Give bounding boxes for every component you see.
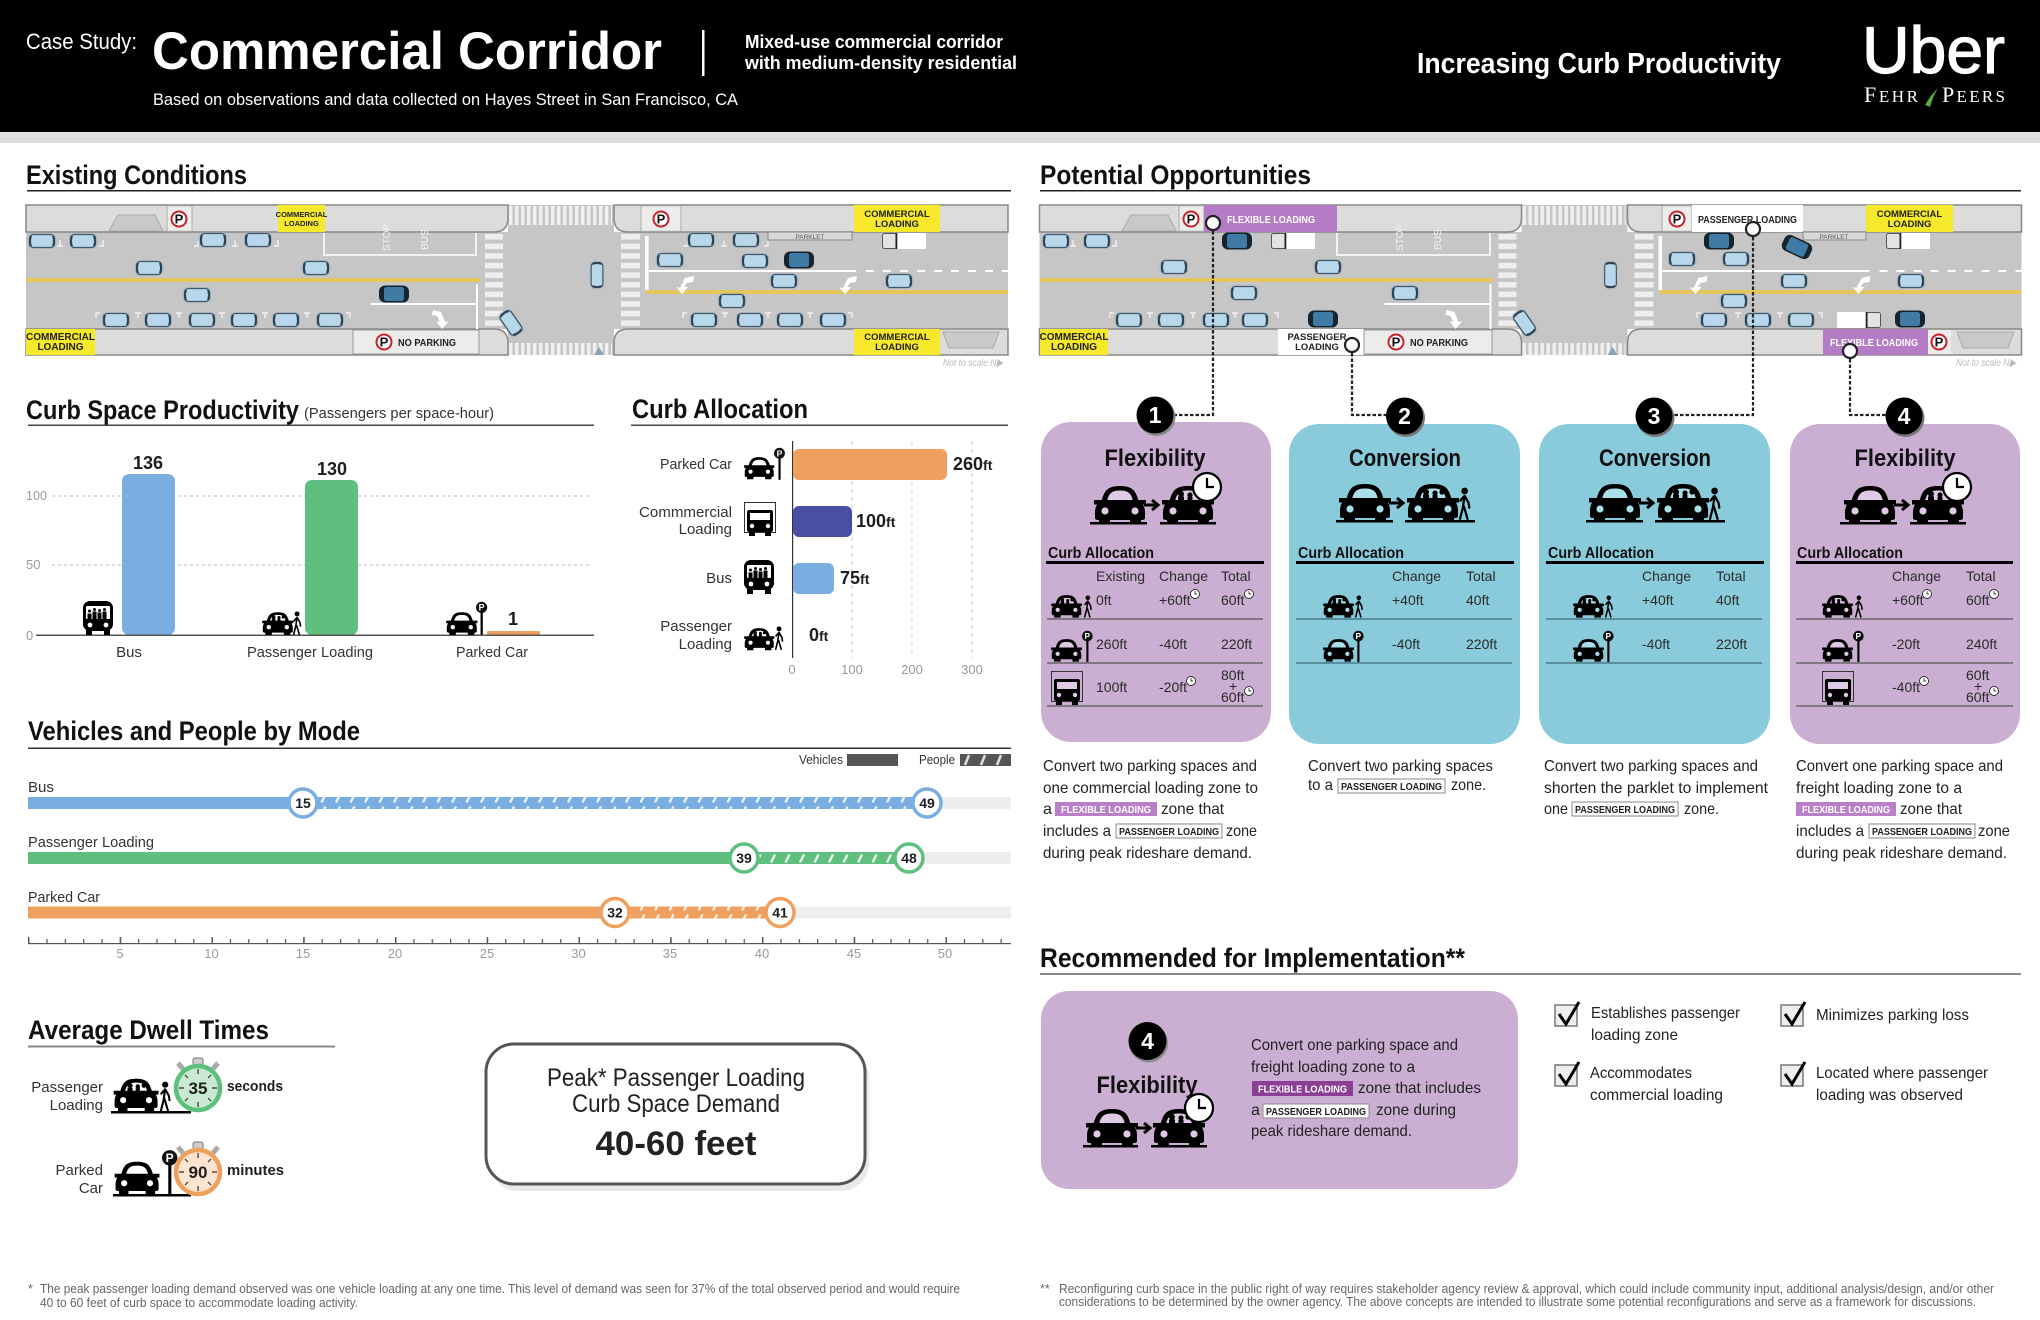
- card 4: flexibility: 60ft: [1966, 592, 1989, 608]
- card 1: flexibility: +60ft: [1159, 592, 1191, 608]
- card 4: flexibility: 60ft: [1966, 667, 1989, 683]
- axis: count scale: 15: [296, 946, 310, 961]
- card 2: conversion: Conversion: [1349, 445, 1461, 472]
- card 1: flexibility: 260ft: [1096, 636, 1127, 652]
- row icons: [1822, 595, 1864, 705]
- text: card 1 description: [1043, 758, 1258, 862]
- text: card 2 description: [1308, 758, 1493, 794]
- bar chart: productivity: 100: [26, 488, 47, 503]
- text: recommendation: zone that includes: [1358, 1080, 1481, 1097]
- text: card 2 description: Convert two parking spaces: [1308, 758, 1493, 775]
- text: recommendation: PASSENGER LOADING: [1266, 1107, 1366, 1118]
- card 3: conversion: [1539, 398, 1770, 744]
- dwell: parked car: minutes: [227, 1162, 284, 1179]
- street map: opportunities: PARKLET: [1819, 234, 1849, 241]
- icon: car to passenger loading: [1586, 484, 1725, 522]
- text: card 1 description: a: [1043, 801, 1052, 818]
- connector: location 3: [1668, 222, 1760, 415]
- dwell: passenger loading: seconds: [227, 1078, 283, 1095]
- text: card 2 description: zone.: [1451, 777, 1486, 794]
- street map: opportunities: PASSENGER LOADING: [1698, 214, 1797, 226]
- check: accommodates commercial loading: Accommodates: [1590, 1065, 1692, 1082]
- bar chart: allocation: 260ft: [953, 454, 993, 474]
- case study label: Case Study:: [26, 29, 137, 54]
- text: card 1 description: includes a: [1043, 823, 1111, 840]
- panel: curb allocation: [631, 394, 1008, 677]
- footnote: reconfiguration: **: [1040, 1282, 1050, 1296]
- callout: peak demand: [486, 1044, 869, 1191]
- card 2: conversion: 40ft: [1466, 592, 1489, 608]
- axis: count scale: 50: [938, 946, 952, 961]
- icon: bus: [83, 601, 113, 635]
- corridor description: Mixed-use commercial corridor: [745, 32, 1003, 52]
- bar chart: allocation: 100: [841, 662, 863, 677]
- bar chart: productivity: 1: [508, 609, 518, 629]
- card 1: flexibility: Change: [1159, 568, 1208, 584]
- card 2: conversion: +40ft: [1392, 592, 1424, 608]
- bar chart: allocation: Passenger: [660, 618, 732, 635]
- check: establishes passenger loading zone: [1555, 1002, 1741, 1044]
- bar: passenger loading: 39: [736, 850, 752, 866]
- text: card 3 description: Convert two parking spaces and: [1544, 758, 1758, 775]
- card 3: conversion: 220ft: [1716, 636, 1747, 652]
- footnote: reconfiguration: considerations to be determined by the owner agency. The above concepts are intended to illustrate some potential reconfigurations and serve as a framework for discussions.: [1059, 1295, 1976, 1309]
- street map: existing: COMMERCIAL: [26, 332, 95, 343]
- dwell: passenger loading: Loading: [50, 1097, 103, 1114]
- badge 4: [1886, 398, 1922, 434]
- card 1: flexibility: -20ft: [1159, 679, 1187, 695]
- text: recommendation: Convert one parking space and: [1251, 1037, 1458, 1054]
- header band: [0, 0, 2040, 143]
- bar: bus: [28, 779, 1011, 817]
- bar chart: productivity: 0: [26, 628, 33, 643]
- row icons: [1323, 595, 1364, 662]
- icon: car to flexible loading: [1083, 1094, 1213, 1148]
- icon: car to flexible loading: [1840, 473, 1971, 524]
- text: card 4 description: [1796, 758, 2010, 862]
- card 3: conversion: Total: [1716, 568, 1746, 584]
- not to scale note: Not to scale N▶: [943, 357, 1004, 369]
- row icons: [1573, 595, 1614, 662]
- badge 1: [1136, 396, 1174, 434]
- bar: bus: [122, 474, 175, 635]
- axis: count scale: 20: [388, 946, 402, 961]
- check: establishes passenger loading zone: Establishes passenger: [1591, 1005, 1741, 1022]
- bar: parked car: 32: [607, 904, 623, 920]
- footnote: peak demand: 40 to 60 feet of curb space to accommodate loading activity.: [40, 1296, 358, 1310]
- street map: existing: [26, 205, 1008, 355]
- bar: passenger loading: [28, 834, 1011, 872]
- bar: bus: 15: [295, 795, 311, 811]
- street map: existing: COMMERCIAL: [276, 210, 328, 219]
- bar chart: allocation: Parked Car: [660, 456, 732, 473]
- text: recommendation: a: [1251, 1102, 1260, 1119]
- footnote: reconfiguration: [1040, 1282, 1994, 1309]
- footnote: peak demand: *: [28, 1282, 33, 1296]
- panel: existing conditions: [26, 160, 1011, 369]
- icon: bus: [744, 560, 774, 594]
- card 1: flexibility: Total: [1221, 568, 1251, 584]
- text: card 1 description: zone that: [1161, 801, 1225, 818]
- row icons: [1051, 595, 1093, 705]
- badge 3: 3: [1648, 403, 1660, 429]
- text: card 3 description: one: [1544, 801, 1568, 818]
- bar chart: allocation: 200: [901, 662, 923, 677]
- bar chart: allocation: Loading: [679, 636, 732, 653]
- bar chart: productivity: 136: [133, 453, 163, 473]
- street map: opportunities: COMMERCIAL: [1877, 209, 1942, 220]
- text: card 3 description: shorten the parklet to implement: [1544, 780, 1769, 797]
- logo: Fehr Peers: [1864, 82, 2005, 107]
- heading: curb allocation: Curb Allocation: [632, 394, 808, 424]
- callout: peak demand: Curb Space Demand: [572, 1090, 780, 1118]
- bar: parked car 260ft: [793, 449, 947, 480]
- legend: Vehicles: [799, 752, 843, 767]
- bar: parked car: [28, 889, 1011, 926]
- icon: car to flexible loading: [1090, 473, 1221, 524]
- dwell: parked car: Parked: [55, 1162, 103, 1179]
- panel: potential opportunities: [1040, 160, 2022, 862]
- heading unit: (Passengers per space-hour): [304, 405, 494, 422]
- street map: opportunities: LOADING: [1888, 219, 1931, 230]
- bar chart: productivity: Passenger Loading: [247, 644, 373, 661]
- text: card 3 description: PASSENGER LOADING: [1575, 805, 1675, 816]
- card: recommended option: [1041, 991, 1518, 1189]
- badge 2: [1386, 398, 1423, 434]
- text: card 4 description: during peak rideshare demand.: [1796, 845, 2007, 862]
- street map: opportunities: FLEXIBLE LOADING: [1830, 337, 1918, 349]
- bar chart: allocation: 75ft: [840, 568, 870, 588]
- text: card 3 description: [1544, 758, 1769, 818]
- bar: bus 75ft: [793, 563, 834, 594]
- card 3: conversion: -40ft: [1642, 636, 1670, 652]
- heading: curb space productivity: Curb Space Productivity: [26, 395, 299, 425]
- text: recommendation: [1251, 1037, 1481, 1140]
- card 1: flexibility: Curb Allocation: [1048, 545, 1154, 562]
- heading: vehicles and people: Vehicles and People by Mode: [28, 716, 360, 746]
- bar chart: allocation: Commmercial: [639, 504, 732, 521]
- corridor description line 2: with medium-density residential: [744, 53, 1017, 73]
- card 2: conversion: -40ft: [1392, 636, 1420, 652]
- card 3: conversion: Change: [1642, 568, 1691, 584]
- card 3: conversion: Conversion: [1599, 445, 1711, 472]
- icon: truck: [744, 502, 776, 536]
- street map: opportunities: COMMERCIAL: [1040, 332, 1108, 343]
- icon: stopwatch 90 minutes: [176, 1150, 220, 1194]
- callout: peak demand: 40-60 feet: [596, 1125, 756, 1163]
- text: card 1 description: during peak rideshare demand.: [1043, 845, 1252, 862]
- check: accommodates commercial loading: commercial loading: [1590, 1087, 1723, 1104]
- check: located where passenger loading was observed: [1781, 1062, 1989, 1104]
- text: card 1 description: FLEXIBLE LOADING: [1061, 805, 1151, 816]
- card 4: flexibility: Change: [1892, 568, 1941, 584]
- bar chart: productivity: [26, 453, 594, 661]
- street map: existing: NO PARKING: [398, 337, 456, 349]
- axis: count scale: 35: [663, 946, 677, 961]
- bar chart: productivity: 130: [317, 459, 347, 479]
- card 3: conversion: 40ft: [1716, 592, 1739, 608]
- logo: Uber: Uber: [1862, 13, 2005, 87]
- text: card 1 description: one commercial loading zone to: [1043, 780, 1258, 797]
- axis: count scale: 30: [571, 946, 586, 961]
- text: card 4 description: zone that: [1900, 801, 1963, 818]
- axis: count scale: 10: [204, 946, 219, 961]
- bar: bus: 49: [919, 795, 935, 811]
- street map: opportunities: BUS: [1433, 229, 1444, 250]
- card 3: conversion: +40ft: [1642, 592, 1674, 608]
- text: card 1 description: PASSENGER LOADING: [1119, 827, 1219, 838]
- footnote: peak demand: [28, 1282, 960, 1310]
- icon: car with person: [744, 626, 783, 650]
- badge 4: 4: [1141, 1028, 1154, 1054]
- dwell: parked car: Car: [79, 1180, 103, 1197]
- badge 4: [1128, 1022, 1166, 1060]
- card 1: flexibility: +: [1229, 678, 1237, 694]
- card 4: flexibility: 240ft: [1966, 636, 1997, 652]
- card 1: flexibility: Existing: [1096, 568, 1145, 584]
- text: card 4 description: zone: [1978, 823, 2010, 840]
- panel: recommended for implementation: [1040, 943, 2021, 1189]
- street map: existing: PARKLET: [795, 234, 825, 241]
- card 4: flexibility: Curb Allocation: [1797, 545, 1903, 562]
- card 1: flexibility: 60ft: [1221, 592, 1244, 608]
- card 1: flexibility: 60ft: [1221, 689, 1244, 705]
- check: located where passenger loading was observed: Located where passenger: [1816, 1065, 1989, 1082]
- text: card 3 description: zone.: [1684, 801, 1719, 818]
- card 1: flexibility: 80ft: [1221, 667, 1244, 683]
- street map: existing: COMMERCIAL: [864, 209, 930, 220]
- bar: parked car: Parked Car: [28, 889, 100, 906]
- bar chart: allocation: 0ft: [809, 625, 829, 645]
- panel: vehicles and people by mode: [28, 716, 1011, 961]
- card 2: conversion: [1289, 398, 1520, 744]
- logo: Fehr Peers: FEHR: [1864, 82, 1919, 107]
- main title: Commercial Corridor: [152, 22, 662, 81]
- bar chart: allocation: [639, 441, 993, 677]
- street map: opportunities: FLEXIBLE LOADING: [1227, 214, 1315, 226]
- card 4: flexibility: -40ft: [1892, 679, 1920, 695]
- card 2: conversion: Curb Allocation: [1298, 545, 1404, 562]
- card 1: flexibility: -40ft: [1159, 636, 1187, 652]
- street map: existing: STOP: [382, 224, 393, 251]
- card 2: conversion: Total: [1466, 568, 1496, 584]
- card 4: flexibility: Flexibility: [1854, 445, 1956, 472]
- dwell: parked car: [55, 1142, 284, 1197]
- text: card 4 description: FLEXIBLE LOADING: [1802, 805, 1890, 816]
- bar: passenger loading: Passenger Loading: [28, 834, 154, 851]
- text: card 4 description: freight loading zone to a: [1796, 780, 1962, 797]
- card 1: flexibility: Flexibility: [1104, 445, 1206, 472]
- dwell: passenger loading: Passenger: [31, 1079, 103, 1096]
- axis: count scale: 25: [480, 946, 494, 961]
- card 2: conversion: Change: [1392, 568, 1441, 584]
- card 4: flexibility: -20ft: [1892, 636, 1920, 652]
- heading: existing conditions: Existing Conditions: [26, 160, 247, 190]
- panel: curb space productivity: [26, 395, 594, 661]
- street map: existing: LOADING: [37, 342, 84, 353]
- icon: parked car: [446, 602, 487, 635]
- text: card 4 description: Convert one parking space and: [1796, 758, 2003, 775]
- street map: opportunities: PASSENGER: [1288, 332, 1347, 343]
- footnote: reconfiguration: Reconfiguring curb space in the public right of way requires stakeholder agency review & approval, which could include community input, additional analysis/design, and/or other: [1059, 1282, 1994, 1296]
- card 4: flexibility: Total: [1966, 568, 1996, 584]
- text: recommendation: FLEXIBLE LOADING: [1258, 1084, 1347, 1096]
- card 3: conversion: Curb Allocation: [1548, 545, 1654, 562]
- axis: count scale: 40: [755, 946, 769, 961]
- card 4: flexibility: 60ft: [1966, 689, 1989, 705]
- bar chart: allocation: 100ft: [856, 511, 896, 531]
- axis: count scale: 5: [116, 946, 124, 961]
- connector: location 2: [1345, 338, 1390, 415]
- subtitle: Based on observations and data collected on Hayes Street in San Francisco, CA: [153, 90, 739, 109]
- legend: People: [919, 752, 955, 767]
- bar chart: allocation: Loading: [679, 521, 732, 538]
- dwell: passenger loading: [31, 1058, 283, 1114]
- bar chart: allocation: 0: [788, 662, 796, 677]
- bar chart: allocation: 300: [961, 662, 983, 677]
- checklist: [1555, 1002, 1989, 1104]
- street map: existing: COMMERCIAL: [864, 332, 930, 343]
- street map: existing: LOADING: [284, 219, 319, 228]
- text: card 4 description: includes a: [1796, 823, 1864, 840]
- bar: bus: Bus: [28, 779, 54, 796]
- bar: passenger loading: [305, 480, 358, 635]
- text: card 1 description: Convert two parking spaces and: [1043, 758, 1257, 775]
- bar: parked car: 41: [772, 904, 788, 920]
- bar: parked car: [487, 631, 540, 635]
- check: minimizes parking loss: [1781, 1002, 1969, 1026]
- right title: Increasing Curb Productivity: [1417, 48, 1781, 80]
- check: accommodates commercial loading: [1555, 1062, 1723, 1104]
- street map: opportunities: STOP: [1395, 224, 1406, 251]
- not to scale note: Not to scale N▶: [1956, 357, 2017, 369]
- icon: car to passenger loading: [1336, 484, 1475, 522]
- street map: existing: LOADING: [875, 219, 919, 230]
- logo: Fehr Peers: PEERS: [1942, 82, 2005, 107]
- street map: opportunities: NO PARKING: [1410, 337, 1468, 349]
- text: recommendation: peak rideshare demand.: [1251, 1123, 1412, 1140]
- card 2: conversion: 220ft: [1466, 636, 1497, 652]
- heading: potential opportunities: Potential Opportunities: [1040, 160, 1311, 190]
- bar chart: productivity: 50: [26, 557, 40, 572]
- connector: location 1: [1170, 216, 1220, 415]
- text: recommendation: freight loading zone to a: [1251, 1059, 1415, 1076]
- card 4: flexibility: +60ft: [1892, 592, 1924, 608]
- badge 1: 1: [1149, 402, 1162, 428]
- card 1: flexibility: 100ft: [1096, 679, 1127, 695]
- check: establishes passenger loading zone: loading zone: [1591, 1027, 1678, 1044]
- icon: stopwatch 35 seconds: [176, 1066, 220, 1110]
- legend: [799, 752, 1011, 767]
- badge 4: 4: [1898, 403, 1911, 429]
- street map: opportunities: LOADING: [1051, 342, 1097, 353]
- axis: count scale: [28, 935, 1011, 961]
- card 4: flexibility: [1790, 398, 2020, 744]
- badge 2: 2: [1398, 403, 1411, 429]
- icon: car with person: [262, 611, 301, 635]
- check: minimizes parking loss: Minimizes parking loss: [1816, 1007, 1969, 1024]
- card 4: flexibility: +: [1974, 678, 1982, 694]
- street map: opportunities: [1040, 205, 2022, 355]
- icon: stopwatch 35 seconds: 35: [189, 1079, 207, 1098]
- heading: average dwell times: Average Dwell Times: [28, 1015, 269, 1045]
- text: card 1 description: zone: [1226, 823, 1257, 840]
- card 1: flexibility: [1041, 396, 1271, 742]
- check: located where passenger loading was observed: loading was observed: [1816, 1087, 1963, 1104]
- card: recommended option: Flexibility: [1096, 1072, 1198, 1099]
- bar: commercial 100ft: [793, 506, 852, 537]
- bar: passenger loading: 48: [901, 850, 917, 866]
- card 1: flexibility: 220ft: [1221, 636, 1252, 652]
- icon: stopwatch 90 minutes: 90: [189, 1163, 207, 1182]
- badge 3: [1636, 398, 1672, 434]
- icon: parked car: [744, 448, 785, 480]
- bar chart: productivity: Bus: [116, 644, 142, 661]
- text: card 4 description: PASSENGER LOADING: [1872, 827, 1972, 838]
- text: card 2 description: PASSENGER LOADING: [1341, 782, 1442, 793]
- heading: recommended: Recommended for Implementation**: [1040, 943, 1465, 973]
- card 1: flexibility: 0ft: [1096, 592, 1112, 608]
- bar chart: productivity: Parked Car: [456, 644, 528, 661]
- text: recommendation: zone during: [1376, 1102, 1456, 1119]
- panel: average dwell times: [28, 1015, 335, 1197]
- callout: peak demand: Peak* Passenger Loading: [547, 1064, 805, 1092]
- street map: existing: BUS: [420, 229, 431, 250]
- footnote: peak demand: The peak passenger loading demand observed was one vehicle loading at any one time. This level of demand was seen for 37% of the total observed period and would require: [40, 1282, 960, 1296]
- street map: existing: LOADING: [875, 342, 919, 353]
- axis: count scale: 45: [847, 946, 861, 961]
- text: card 2 description: to a: [1308, 777, 1333, 794]
- street map: opportunities: LOADING: [1295, 342, 1339, 353]
- connector: location 4: [1843, 344, 1890, 415]
- bar chart: allocation: Bus: [706, 570, 732, 587]
